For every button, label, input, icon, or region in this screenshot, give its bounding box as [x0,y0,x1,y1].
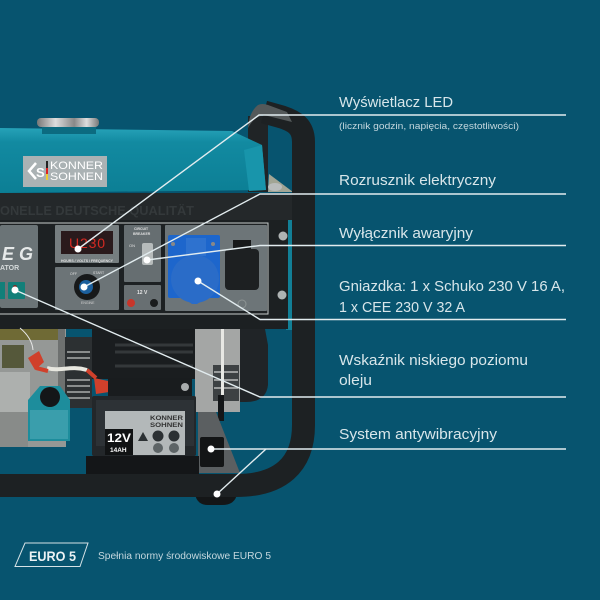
black header bar [0,193,293,220]
battery: KONNER [150,416,184,422]
circuit breaker panel: BREAKER [133,232,151,236]
callout: LED display: (licznik godzin, napięcia, częstotliwości) [339,121,519,132]
fuel tank [0,128,266,193]
starter switch panel [55,267,119,310]
warning tag [28,386,70,441]
LED display: HOURS / VOLTS / FREQUENCY [61,259,114,263]
engine block [0,329,268,473]
circuit breaker panel: CIRCUIT [134,227,149,231]
tank corner facet [244,145,266,191]
12V panel: 12 V [137,290,148,296]
callout: anti-vibration system [208,426,566,498]
LED display [55,225,119,263]
callout: sockets: Gniazdka: 1 x Schuko 230 V 16 A, [339,278,565,295]
generator illustration [0,104,304,505]
callout: LED display [74,94,566,252]
panel outline [0,223,268,314]
earth screw [238,300,246,308]
callout: emergency switch [144,225,566,264]
callout: sockets [194,278,566,320]
callout: low oil indicator: oleju [339,372,372,389]
rubber foot [195,494,237,505]
brand plate [23,156,107,187]
tubular frame [0,112,304,486]
Schuko black socket [225,240,259,290]
battery: 14AH [110,447,127,454]
starter switch panel: OFF [70,272,77,276]
brand plate: S [36,165,45,180]
callout: low oil indicator [12,286,566,397]
EURO 5 description: Spełnia normy środowiskowe EURO 5 [98,551,271,562]
CEE blue socket [168,235,220,304]
12V panel [124,285,161,310]
handle rear tube [248,116,268,192]
battery: SOHNEN [150,423,183,429]
callout: anti-vibration system: System antywibracyjny [339,426,498,443]
mounting bolt [268,174,293,192]
frame bolts [278,232,304,300]
battery: 12V [107,431,131,445]
callout: low oil indicator: Wskaźnik niskiego poziomu [339,352,528,369]
callout: electric starter: Rozrusznik elektryczny [339,172,496,189]
battery [86,378,199,478]
wires and red terminals [20,328,109,394]
circuit breaker panel: ON [129,243,135,248]
brand plate: SOHNEN [50,171,103,183]
EURO 5 badge [15,543,88,566]
handle grip highlight [248,104,292,128]
black header bar: ONELLE DEUTSCHE QUALITÄT [0,203,194,218]
brand plate: KONNER [50,160,103,172]
fuel cap [37,118,99,134]
label panel: E G [2,244,33,264]
callout: electric starter [80,172,566,290]
callout: emergency switch: Wyłącznik awaryjny [339,225,474,242]
control panel background [0,220,288,329]
label panel: ATOR [0,265,19,272]
callout: LED display: Wyświetlacz LED [339,94,453,111]
callout: sockets: 1 x CEE 230 V 32 A [339,299,465,316]
socket panel [165,225,267,311]
starter switch panel: START [93,271,105,275]
circuit breaker panel [124,225,161,282]
starter switch panel: ENGINE [81,301,95,305]
teal sliver behind frame [286,220,294,330]
anti-vibration mount [200,437,224,467]
EURO 5 badge: EURO 5 [29,548,76,564]
label panel [0,225,38,308]
LED display: U230 [69,235,105,251]
